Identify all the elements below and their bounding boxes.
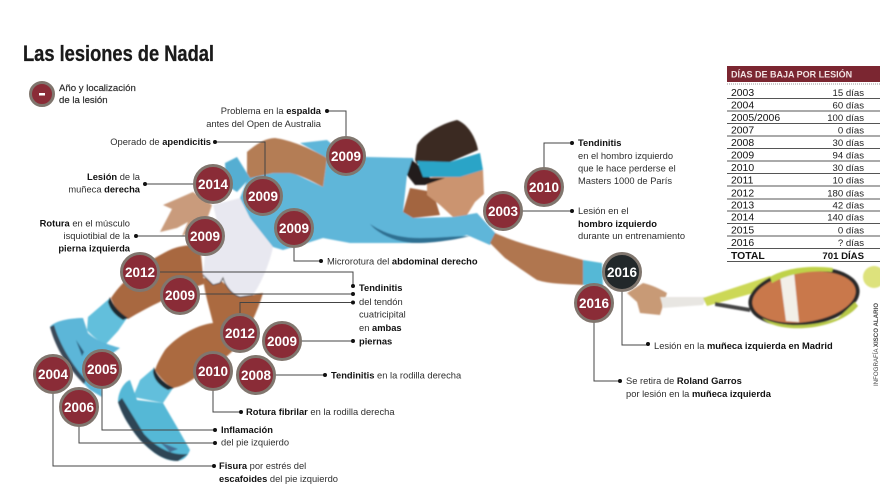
annotation: muñeca derecha 2014 [68,166,232,202]
annotation: isquiotibial 2009: pierna izquierda [58,244,131,254]
annotation: hombro izquierdo 2003: durante un entrenamiento [578,231,685,241]
table: días de baja por lesión: 2007 [731,126,754,136]
annotation: tendinitis cuatricipital [122,254,406,360]
annotation: tendinitis hombro 2010: en el hombro izquierdo [578,151,673,161]
front wristband [583,260,603,287]
annotation: rodilla derecha 2008: Tendinitis en la rodilla derecha [331,370,462,380]
annotation: isquiotibial 2009 [40,218,224,254]
annotation: isquiotibial 2009: isquiotibial de la [64,231,131,241]
illustration: racquet [660,260,863,334]
annotation: abdominal 2009: Microrotura del abdominal derecho [327,256,478,266]
annotation: Roland Garros 2016: Se retira de Roland Garros [626,376,742,386]
annotation: muñeca Madrid 2016: 2016 [607,265,638,280]
table: días de baja por lesión: 30 días [833,163,864,174]
annotation: fisura escafoides 2004: Fisura por estrés del [219,461,306,471]
table: días de baja por lesión: 2008 [731,138,754,149]
annotation: apendicitis 2009: Operado de apendicitis [110,137,211,147]
shorts [203,198,273,297]
rear shoe [50,318,120,397]
annotation: tendinitis cuatricipital: 2009 [267,334,297,349]
table: días de baja por lesión: 2014 [731,212,754,224]
annotation: Roland Garros 2016: por lesión en la muñeca izquierda [626,389,772,399]
annotation: inflamación pie izquierdo 2005 2006: del pie izquierdo [221,438,289,448]
table: días de baja por lesión: ? días [838,238,864,249]
annotation: hombro izquierdo 2003: Lesión en el [578,206,628,216]
rear leg [111,245,204,319]
shirt [240,140,497,250]
legend: de la lesión [59,95,108,106]
table: días de baja por lesión: 2004 [731,100,754,112]
annotation: hombro izquierdo 2003: hombro izquierdo [578,219,657,229]
annotation: tendinitis cuatricipital: cuatricipital [359,310,406,320]
annotation: isquiotibial 2009: 2009 [190,229,220,244]
annotation: hombro izquierdo 2003 [484,192,685,241]
annotation: rotura fibrilar 2010: Rotura fibrilar en la rodilla derecha [246,407,395,417]
table: días de baja por lesión: 2009 [731,150,754,162]
table: días de baja por lesión: DÍAS DE BAJA POR LESIÓN [731,68,852,80]
front sock [133,368,173,403]
table: días de baja por lesión: TOTAL [731,251,765,262]
annotation: tendinitis hombro 2010: que le hace perderse el [578,164,676,174]
headband [417,153,483,177]
annotation: inflamación pie izquierdo 2005 2006: Inflamación [221,425,273,435]
neck [403,188,440,218]
credit: INFOGRAFÍA XISCO ALARIO [871,303,880,386]
table: días de baja por lesión: 94 días [833,150,864,162]
annotation: tendinitis cuatricipital: en ambas [359,323,402,333]
illustration: player [50,120,667,461]
annotation: inflamación pie izquierdo 2005 2006 [60,350,289,448]
annotation: apendicitis 2009 [110,137,282,214]
table: días de baja por lesión: 42 días [833,200,864,212]
face [427,170,484,217]
annotation: tendinitis cuatricipital: piernas [359,336,392,346]
tennis ball [863,266,880,288]
title: Las lesiones de Nadal [23,41,214,66]
wristband back [225,157,250,192]
front arm [490,233,583,285]
table: días de baja por lesión: 2012 [731,188,754,200]
annotation: Roland Garros 2016: 2016 [579,296,610,311]
annotation: espalda 2009: Problema en la espalda [221,106,322,116]
table: días de baja por lesión: 2003 [731,88,754,99]
table: días de baja por lesión: 2013 [731,200,754,212]
annotation: tendinitis cuatricipital: Tendinitis [359,283,402,293]
annotation: inflamación pie izquierdo 2005 2006: 2005 [87,362,118,377]
legend: Año y localización [59,83,136,94]
front hand [627,283,667,315]
annotation: rotura fibrilar 2010 [194,352,395,417]
annotation: muñeca Madrid 2016: Lesión en la muñeca izquierda en Madrid [654,341,833,351]
table: días de baja por lesión: 180 días [827,188,864,200]
annotation: espalda 2009: 2009 [331,149,361,164]
annotation: tendinitis hombro 2010: Tendinitis [578,138,621,148]
annotation: tendinitis cuatricipital: 2012 [125,265,155,280]
annotation: hombro izquierdo 2003: 2003 [488,204,519,219]
table: días de baja por lesión: 0 días [838,226,864,236]
annotation: tendinitis hombro 2010: 2010 [529,180,559,195]
annotation: fisura escafoides 2004: 2004 [38,367,69,382]
annotation: muñeca derecha 2014: muñeca derecha [68,184,141,194]
front leg [155,278,263,388]
hair [415,120,478,164]
table: días de baja por lesión: 15 días [833,88,864,99]
annotation: tendinitis cuatricipital: 2009 [165,288,195,303]
annotation: Roland Garros 2016 [576,284,772,399]
annotation: abdominal 2009 [276,210,478,266]
rear sock [87,298,127,344]
upper arm [247,138,327,187]
table: días de baja por lesión: 2015 [731,226,754,236]
annotation: rodilla derecha 2008 [238,356,462,394]
annotation: espalda 2009: antes del Open de Australia [206,119,322,129]
annotation: tendinitis hombro 2010: Masters 1000 de París [578,176,672,186]
annotation: fisura escafoides 2004 [34,356,338,484]
table: días de baja por lesión: 30 días [833,138,864,149]
table: días de baja por lesión: 0 días [838,126,864,136]
table: días de baja por lesión: 2016 [731,238,754,249]
table: días de baja por lesión: 100 días [827,113,864,124]
annotation: muñeca Madrid 2016 [604,254,833,351]
annotation: rodilla derecha 2008: 2008 [241,368,272,383]
annotation: muñeca derecha 2014: Lesión de la [87,172,141,182]
annotation: rotura fibrilar 2010: 2010 [198,364,228,379]
front shoe [118,380,190,461]
legend [30,82,136,106]
annotation: muñeca derecha 2014: 2014 [198,177,229,192]
table: días de baja por lesión: 10 días [833,176,864,186]
annotation: tendinitis cuatricipital: del tendón [359,297,403,307]
table: días de baja por lesión: 2005/2006 [731,113,780,124]
table: días de baja por lesión [727,66,880,262]
table: días de baja por lesión: 140 días [827,212,864,224]
annotation: isquiotibial 2009: Rotura en el músculo [40,218,130,228]
annotation: apendicitis 2009: 2009 [248,189,278,204]
table: días de baja por lesión: 701 DÍAS [822,250,865,262]
annotation: abdominal 2009: 2009 [279,221,309,236]
annotation: fisura escafoides 2004: escafoides del pie izquierdo [219,474,338,484]
table: días de baja por lesión: 60 días [833,100,864,112]
hand right [160,192,212,236]
annotation: inflamación pie izquierdo 2005 2006: 2006 [64,400,95,415]
annotation: tendinitis cuatricipital: 2012 [225,326,255,341]
table: días de baja por lesión: 2010 [731,163,754,174]
annotation: espalda 2009 [206,106,364,174]
annotation: tendinitis hombro 2010 [526,138,676,206]
table: días de baja por lesión: 2011 [731,176,754,186]
